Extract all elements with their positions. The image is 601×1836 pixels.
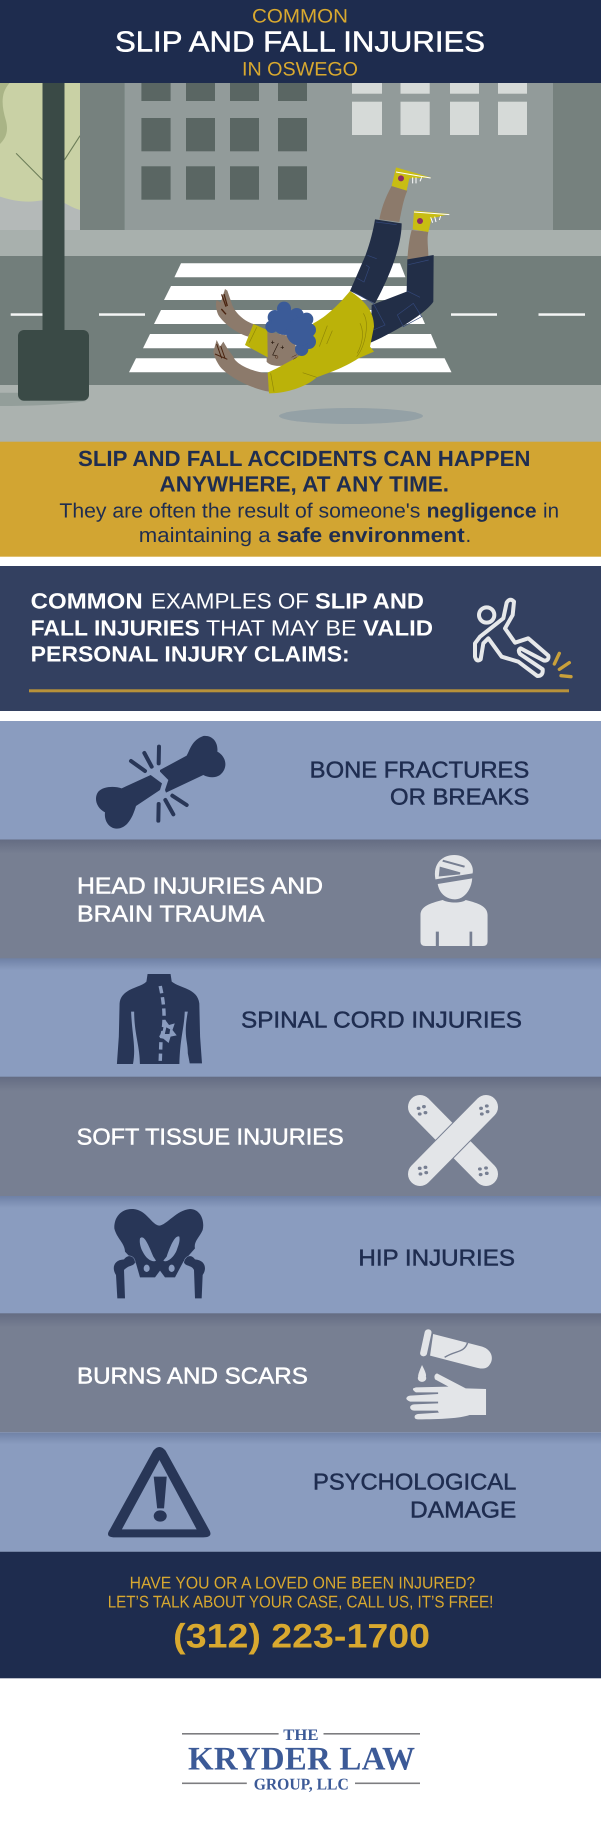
gold intro band: maintaining a <box>139 524 271 547</box>
header banner <box>0 0 601 83</box>
row: soft tissue injuries: SOFT TISSUE INJURIES <box>77 1123 344 1149</box>
navy subheading panel: FALL INJURIES <box>31 615 200 640</box>
law firm logo: THE <box>283 1727 318 1744</box>
header banner: COMMON <box>252 6 348 28</box>
row: soft tissue injuries <box>0 1077 601 1196</box>
law firm logo: GROUP, LLC <box>254 1774 349 1793</box>
tree <box>0 83 80 210</box>
row: psychological damage: PSYCHOLOGICAL <box>313 1469 517 1495</box>
signpost <box>18 83 89 401</box>
buildings <box>80 83 601 230</box>
navy subheading panel: EXAMPLES OF <box>151 588 309 613</box>
footer call to action: HAVE YOU OR A LOVED ONE BEEN INJURED? <box>130 1574 475 1593</box>
gold intro band: SLIP AND FALL ACCIDENTS CAN HAPPEN <box>78 446 530 471</box>
header banner: IN OSWEGO <box>242 59 358 81</box>
row: bone fractures: OR BREAKS <box>390 784 529 810</box>
navy subheading panel: PERSONAL INJURY CLAIMS: <box>31 642 350 667</box>
row: spinal cord injuries <box>0 958 601 1077</box>
row: psychological damage: DAMAGE <box>410 1497 516 1523</box>
icon: chemical on hand <box>406 1332 492 1419</box>
row: burns and scars <box>0 1313 601 1432</box>
gold intro band: They are often the result of someone's <box>59 499 420 522</box>
icon: falling man <box>475 600 571 677</box>
footer call to action <box>0 1552 601 1678</box>
gold intro band: in <box>543 499 559 522</box>
law firm logo: KRYDER LAW <box>188 1741 415 1777</box>
street scene illustration <box>0 83 601 442</box>
navy subheading panel <box>0 566 601 711</box>
footer call to action: LET’S TALK ABOUT YOUR CASE, CALL US, IT’S FREE! <box>108 1593 493 1612</box>
row: bone fractures <box>0 721 601 840</box>
row: hip injuries: HIP INJURIES <box>358 1245 515 1271</box>
footer call to action: (312) 223-1700 <box>173 1617 430 1655</box>
navy subheading panel: COMMON <box>31 588 143 613</box>
row: head injuries <box>0 840 601 958</box>
icon: warning triangle <box>108 1447 210 1537</box>
navy subheading panel: VALID <box>363 615 433 640</box>
icon: crossed bandages <box>417 1104 489 1176</box>
header banner: SLIP AND FALL INJURIES <box>115 26 485 58</box>
law firm logo <box>182 1727 420 1793</box>
navy subheading panel: THAT MAY BE <box>206 615 356 640</box>
sidewalks and road <box>0 230 601 442</box>
row: spinal cord injuries: SPINAL CORD INJURIES <box>241 1007 522 1033</box>
row: head injuries: BRAIN TRAUMA <box>77 901 265 927</box>
crosswalk <box>129 263 452 372</box>
row: head injuries: HEAD INJURIES AND <box>77 872 323 898</box>
icon: spine back <box>117 974 202 1064</box>
gold intro band: . <box>466 524 471 547</box>
row: burns and scars: BURNS AND SCARS <box>77 1362 308 1388</box>
icon: bandaged head <box>420 855 488 946</box>
gold intro band: ANYWHERE, AT ANY TIME. <box>160 472 449 497</box>
signpost shadow <box>0 393 87 406</box>
row: bone fractures: BONE FRACTURES <box>310 756 529 782</box>
gold intro band: safe environment <box>277 524 465 547</box>
icon: pelvis <box>114 1209 205 1298</box>
gold intro band: negligence <box>427 499 537 522</box>
icon: broken bone <box>96 736 225 829</box>
lane dashes <box>11 313 585 316</box>
row: psychological damage <box>0 1432 601 1552</box>
navy subheading panel: SLIP AND <box>315 588 424 613</box>
ground shadow <box>279 408 423 424</box>
gold intro band <box>0 442 601 557</box>
row: hip injuries <box>0 1196 601 1314</box>
falling person <box>213 167 450 393</box>
